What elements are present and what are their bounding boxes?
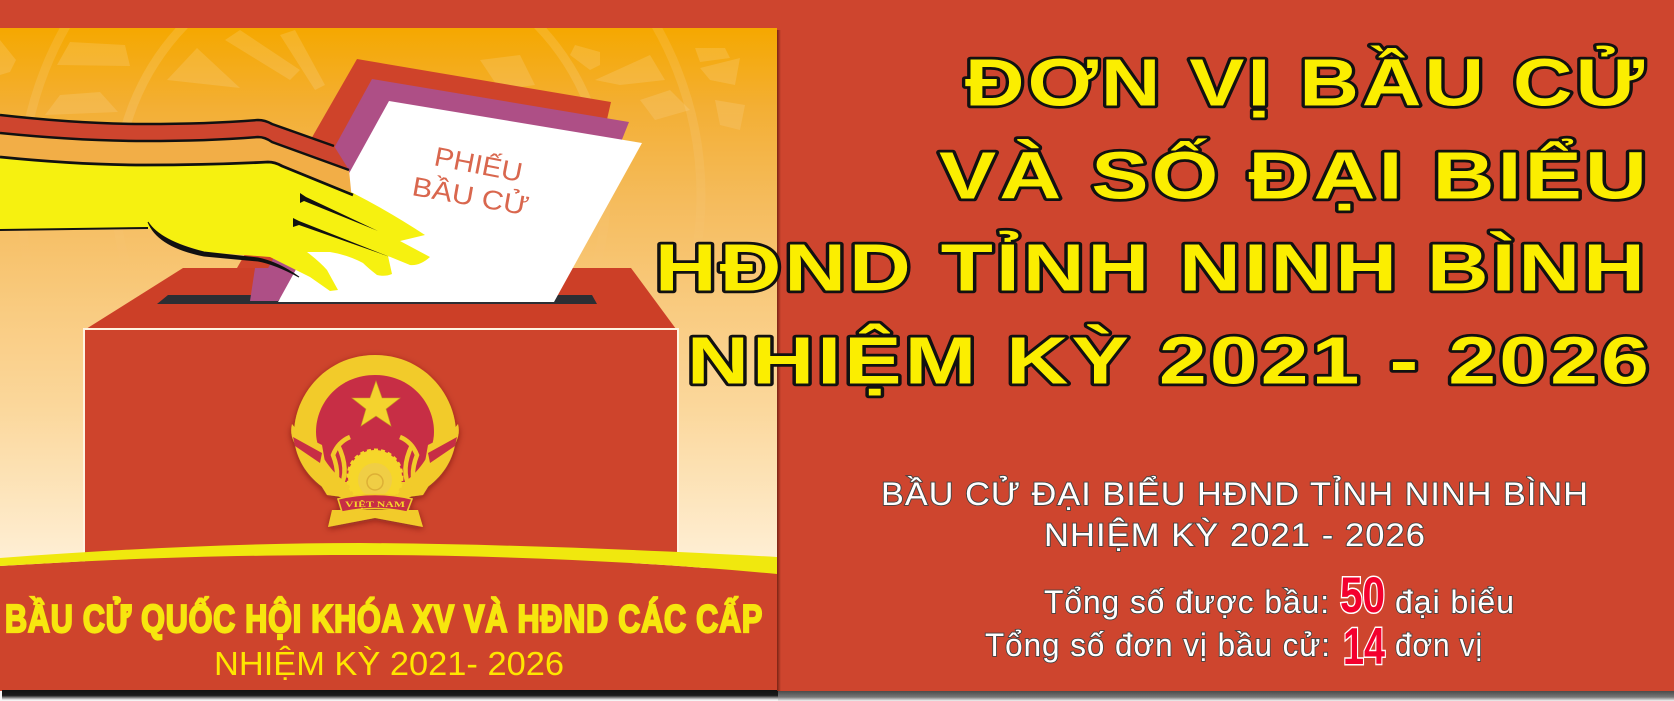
title: VÀ SỐ ĐẠI BIỂU [939,138,1650,214]
footer heading: BẦU CỬ QUỐC HỘI KHÓA XV VÀ HĐND CÁC CẤP [5,596,763,641]
title: ĐƠN VỊ BẦU CỬ [965,46,1647,120]
hand [0,157,430,291]
stat: total delegates: Tổng số được bầu: [1044,584,1330,620]
title: NHIỆM KỲ 2021 - 2026 [687,324,1652,398]
stat: total delegates: đại biểu [1395,584,1515,620]
emblem gold disc [294,355,456,505]
ballot: white paper [278,101,642,302]
title: HĐND TỈNH NINH BÌNH [655,230,1648,306]
emblem red field [316,375,434,482]
panel: ballot box illustration [0,0,777,690]
ballot: red back sheet [237,59,611,268]
ballot text: BẦU CỬ [410,169,532,221]
title [655,46,1652,398]
yellow swoosh [0,543,777,574]
ballot box lid [86,268,676,329]
panel background [0,28,777,568]
subtitle: BẦU CỬ ĐẠI BIỂU HĐND TỈNH NINH BÌNH [881,476,1589,512]
emblem banner: VIỆT NAM [345,499,405,509]
footer term: NHIỆM KỲ 2021- 2026 [214,645,564,682]
emblem base [328,510,423,527]
ballot box front [84,329,678,564]
stat: total election units: Tổng số đơn vị bầu cử: [985,627,1331,663]
red footer band [0,561,704,568]
emblem banner [338,494,412,512]
ballot slot [157,295,597,304]
ballot text [414,147,530,214]
drum watermark pattern [0,28,745,176]
emblem side ribbons [291,424,459,497]
number 50: 50 [1340,567,1385,623]
subtitle [881,476,1589,553]
ballot: purple middle sheet [268,79,629,268]
emblem gear [348,450,402,504]
national emblem [291,355,459,527]
ballot text: PHIẾU [432,140,525,188]
emblem rice stalks [330,434,420,482]
subtitle: NHIỆM KỲ 2021 - 2026 [1044,517,1426,553]
number 14: 14 [1343,618,1385,676]
stat: total election units [985,618,1483,676]
emblem star [352,381,400,426]
stat: total delegates [1044,567,1515,623]
stat: total election units: đơn vị [1395,627,1483,663]
sleeve stripes [0,115,352,200]
ballot: purple sheet in front of lid [250,268,296,301]
